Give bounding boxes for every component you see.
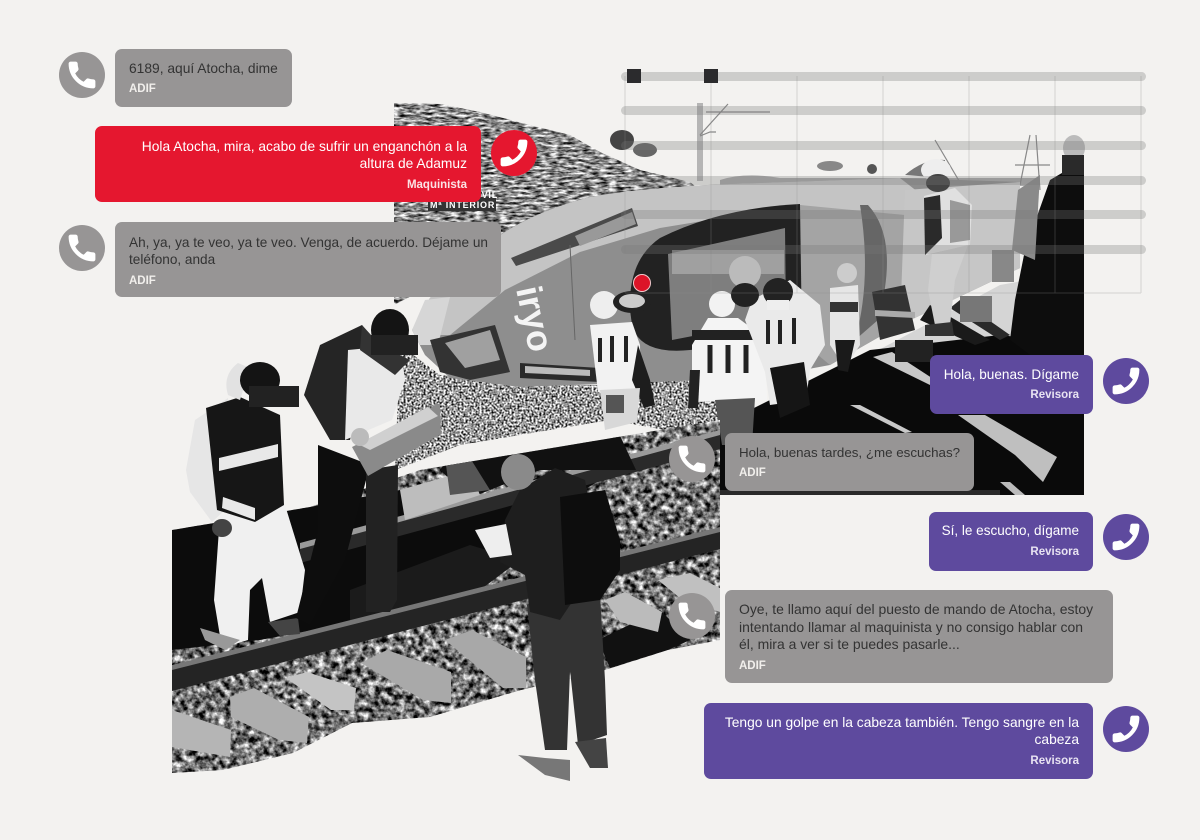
equipment boxes bbox=[992, 250, 1014, 282]
tree and catenary pole bbox=[610, 103, 1040, 186]
near rail bbox=[172, 530, 720, 691]
investigator with backpack bbox=[475, 454, 620, 781]
bubble: ADIF 1: 6189, aquí Atocha, dime bbox=[129, 61, 278, 76]
bubble: Maquinista: Maquinista bbox=[407, 179, 467, 191]
concrete sleepers bbox=[172, 710, 231, 757]
bubble: ADIF 2: Ah, ya, ya te veo, ya te veo. Venga, de acuerdo. Déjame un bbox=[129, 235, 488, 250]
bubble: Revisora 1: Revisora bbox=[1030, 389, 1079, 401]
bubble: Revisora 2: Revisora bbox=[1030, 546, 1079, 558]
censor bar bbox=[249, 386, 299, 407]
far catenary and workers in distance bbox=[935, 135, 1050, 225]
bubble: Maquinista: altura de Adamuz bbox=[360, 156, 467, 171]
call icon: ADIF 4 bbox=[669, 593, 715, 639]
iryo logo: iryo bbox=[508, 282, 562, 355]
overturned train body bbox=[412, 178, 1020, 387]
shadows on track bbox=[172, 470, 600, 650]
bubble: ADIF 4 bbox=[725, 590, 1113, 683]
ground on right side bbox=[860, 270, 1084, 360]
call icon: Revisora 3 bbox=[1103, 706, 1149, 752]
lower photo: railway track bbox=[172, 309, 722, 781]
upper photo: wrecked train scene bbox=[394, 103, 1085, 495]
shaded ground with light stripes bbox=[720, 300, 1084, 495]
censor bar bbox=[371, 335, 418, 355]
dark foreground figure bbox=[1010, 135, 1085, 356]
bubble: ADIF 1: ADIF bbox=[129, 83, 156, 95]
bubble: Maquinista: Hola Atocha, mira, acabo de sufrir un enganchón a la bbox=[142, 139, 467, 154]
call icon: ADIF 2 bbox=[59, 225, 105, 271]
red marker dot bbox=[634, 274, 650, 292]
call icon: Maquinista bbox=[491, 130, 537, 176]
bubble: Maquinista bbox=[95, 126, 481, 202]
bubble: ADIF 4: ADIF bbox=[739, 660, 766, 672]
bubble: Revisora 1: Hola, buenas. Dígame bbox=[944, 367, 1079, 382]
train windscreen bbox=[511, 208, 638, 266]
bubble: ADIF 3: Hola, buenas tardes, ¿me escuchas? bbox=[739, 445, 960, 460]
bubble: ADIF 3: ADIF bbox=[739, 467, 766, 479]
bubble: Revisora 3 bbox=[704, 703, 1093, 779]
bubble: Revisora 2: Sí, le escucho, dígame bbox=[942, 523, 1079, 538]
call icon: ADIF 1 bbox=[59, 52, 105, 98]
photo collage: derailed train and investigators bbox=[172, 69, 1146, 781]
bubble: ADIF 1 bbox=[115, 49, 292, 107]
gravel under train bbox=[395, 355, 718, 469]
train nose and bumper bbox=[412, 297, 450, 345]
bubble: ADIF 4: él, mira a ver si te puedes pasarle... bbox=[739, 636, 960, 652]
dark door and side window bbox=[630, 204, 802, 351]
bubble: Revisora 2 bbox=[929, 512, 1093, 571]
police sign text on wall: CIVIL bbox=[471, 190, 498, 200]
bubble: ADIF 3 bbox=[725, 433, 974, 491]
call icon: Revisora 2 bbox=[1103, 514, 1149, 560]
bubble: ADIF 2 bbox=[115, 222, 501, 297]
bubble: Revisora 1 bbox=[930, 355, 1093, 414]
bubble: Revisora 3: cabeza bbox=[1034, 732, 1079, 747]
firefighter group around train door bbox=[590, 256, 915, 445]
call icon: Revisora 1 bbox=[1103, 358, 1149, 404]
investigator with case bbox=[296, 309, 441, 625]
bubble: ADIF 2: teléfono, anda bbox=[129, 252, 215, 267]
far rail bbox=[300, 434, 720, 563]
standing firefighter bbox=[921, 159, 972, 336]
hillside behind train bbox=[394, 103, 704, 308]
bubble: ADIF 4: intentando llamar al maquinista y no consigo hablar con bbox=[739, 618, 1083, 634]
bubble: Revisora 3: Tengo un golpe en la cabeza también. Tengo sangre en la bbox=[725, 715, 1079, 730]
undercarriage debris bbox=[440, 436, 636, 494]
investigator with vest bbox=[186, 362, 305, 650]
police sign text on wall: Mª INTERIOR bbox=[430, 200, 495, 210]
timeline grid overlay bbox=[621, 69, 1146, 293]
call icon: ADIF 3 bbox=[669, 436, 715, 482]
ballast bed bbox=[172, 410, 722, 780]
bubble: Revisora 3: Revisora bbox=[1030, 755, 1079, 767]
bubble: ADIF 2: ADIF bbox=[129, 275, 156, 287]
police sign text on wall bbox=[428, 190, 498, 211]
bubble: ADIF 4: Oye, te llamo aquí del puesto de mando de Atocha, estoy bbox=[739, 601, 1093, 617]
